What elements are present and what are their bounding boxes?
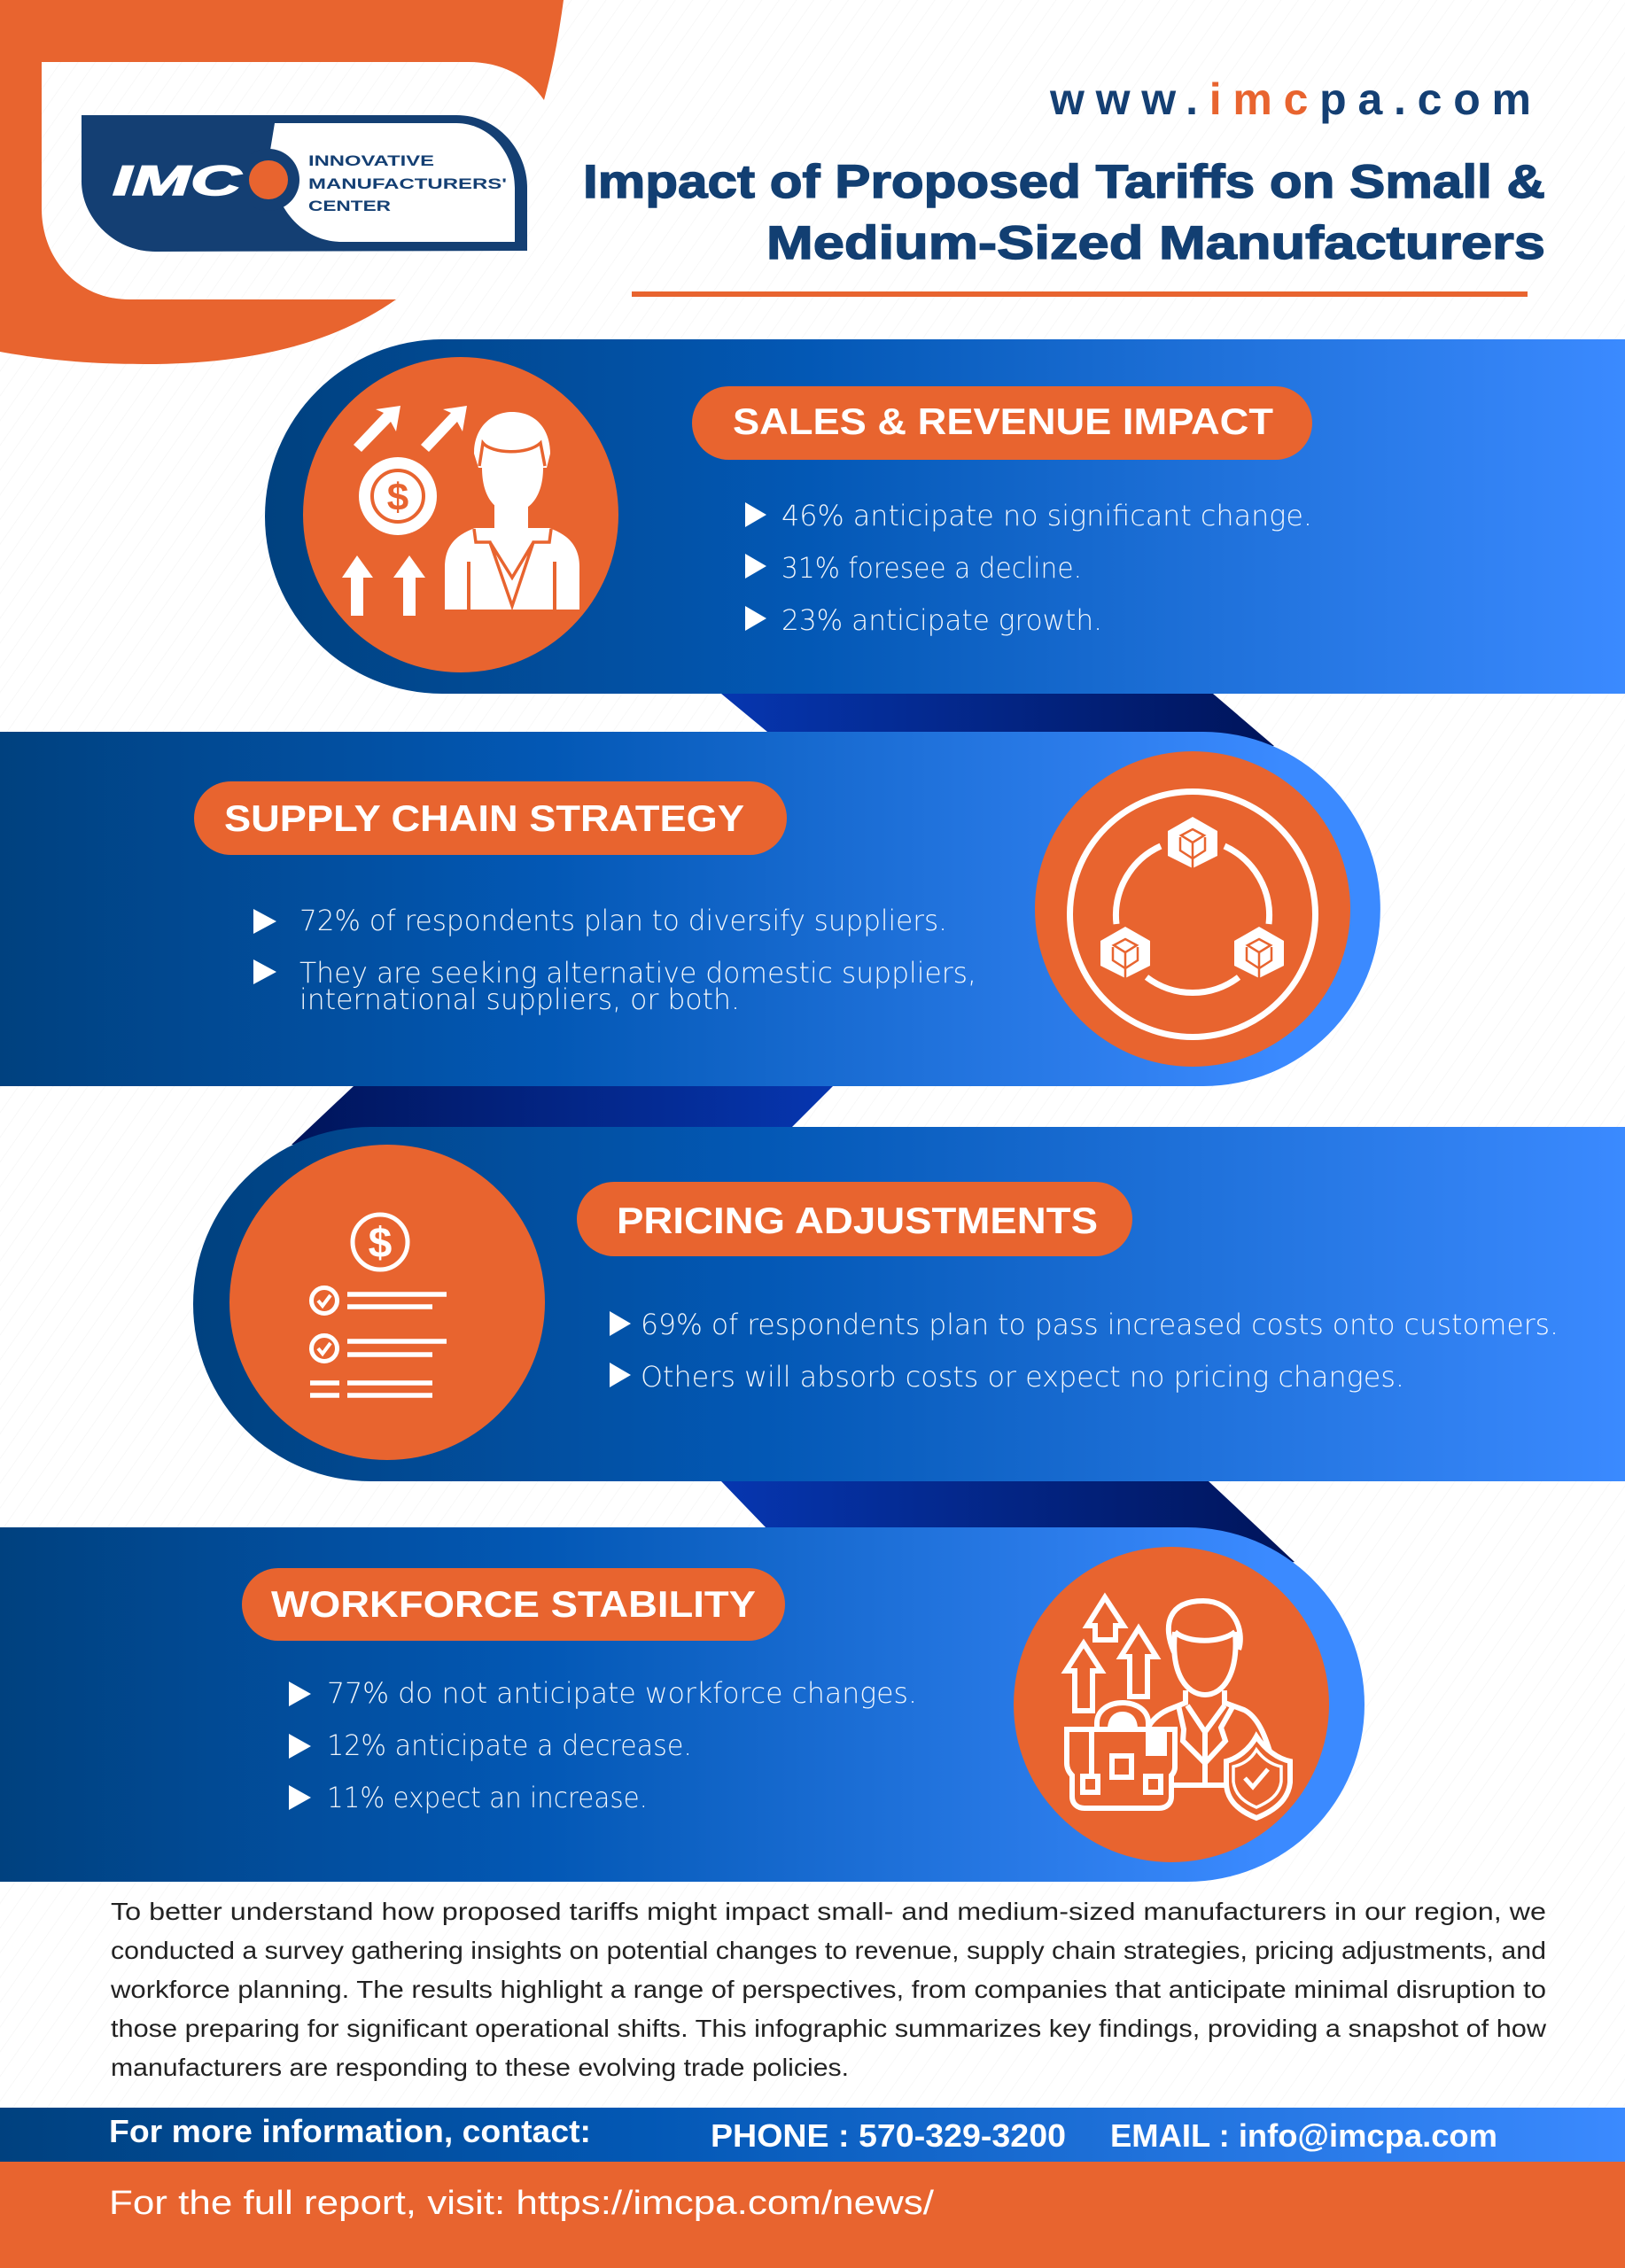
- intro paragraph: [110, 1898, 1547, 2081]
- heading pill: [692, 386, 1312, 460]
- intro paragraph: To better understand how proposed tariffs might impact small- and medium-sized manufacturers in our region, we: [111, 1898, 1546, 1925]
- bullet list: [745, 499, 1312, 637]
- heading pill: PRICING ADJUSTMENTS: [617, 1200, 1098, 1241]
- heading pill: [194, 781, 787, 855]
- title: Medium-Sized Manufacturers: [766, 217, 1545, 269]
- bullet list: 69% of respondents plan to pass increased costs onto customers.: [641, 1308, 1559, 1341]
- icon: pricing checklist: [310, 1215, 447, 1395]
- intro paragraph: workforce planning. The results highlight a range of perspectives, from companies that anticipate minimal disruption to: [110, 1976, 1546, 2003]
- bullet list: 31% foresee a decline.: [781, 551, 1082, 585]
- logo: IMC Innovative Manufacturers' Center: INNOVATIVE: [308, 152, 434, 169]
- icon: supply chain cycle: [1070, 792, 1315, 1037]
- logo: IMC Innovative Manufacturers' Center: [82, 115, 527, 252]
- heading pill: SALES & REVENUE IMPACT: [733, 400, 1273, 442]
- bullet list: [253, 904, 976, 1016]
- contact bar: For more information, contact:: [109, 2113, 591, 2149]
- contact bar: [0, 2108, 1625, 2162]
- heading pill: WORKFORCE STABILITY: [271, 1583, 756, 1625]
- intro paragraph: those preparing for significant operational shifts. This infographic summarizes key findings, providing a snapshot of how: [111, 2015, 1547, 2042]
- title: [583, 156, 1545, 269]
- panel: workforce stability: [0, 1527, 1365, 1882]
- icon: revenue growth person: $: [387, 476, 408, 519]
- bullet list: 11% expect an increase.: [327, 1781, 648, 1814]
- bullet list: 23% anticipate growth.: [781, 603, 1102, 637]
- bullet list: [610, 1308, 1559, 1394]
- full report bar: [0, 2162, 1625, 2268]
- heading pill: [577, 1182, 1132, 1256]
- header orange frame: [0, 0, 564, 364]
- website url: www. imc pa.com: [1049, 74, 1531, 124]
- contact bar: PHONE : 570-329-3200: [711, 2117, 1066, 2154]
- icon: pricing checklist: $: [369, 1220, 393, 1267]
- panel: supply chain strategy: [0, 732, 1380, 1086]
- bullet list: 12% anticipate a decrease.: [327, 1728, 692, 1762]
- bullet list: 46% anticipate no significant change.: [781, 499, 1312, 532]
- connector: supply chain to pricing: [292, 1086, 833, 1145]
- bullet list: international suppliers, or both.: [299, 983, 740, 1016]
- heading pill: SUPPLY CHAIN STRATEGY: [224, 797, 744, 839]
- icon: revenue growth person: [342, 406, 579, 616]
- logo: IMC Innovative Manufacturers' Center: IMC: [113, 157, 243, 204]
- intro paragraph: manufacturers are responding to these evolving trade policies.: [111, 2054, 849, 2081]
- bullet list: 77% do not anticipate workforce changes.: [327, 1676, 917, 1710]
- bullet list: They are seeking alternative domestic suppliers,: [299, 956, 976, 990]
- bullet list: Others will absorb costs or expect no pricing changes.: [641, 1360, 1404, 1394]
- title underline: [632, 291, 1528, 297]
- bullet list: 72% of respondents plan to diversify suppliers.: [299, 904, 947, 937]
- icon: workforce person with bag and shield: [1066, 1597, 1290, 1818]
- connector: sales to supply chain: [721, 694, 1274, 753]
- intro paragraph: conducted a survey gathering insights on potential changes to revenue, supply chain strategies, pricing adjustments, and: [111, 1937, 1546, 1964]
- heading pill: [242, 1568, 785, 1641]
- logo: IMC Innovative Manufacturers' Center: MANUFACTURERS': [308, 175, 507, 192]
- bullet list: [289, 1676, 917, 1814]
- contact bar: EMAIL : info@imcpa.com: [1110, 2117, 1497, 2154]
- logo: IMC Innovative Manufacturers' Center: CENTER: [308, 198, 391, 214]
- panel: pricing adjustments: [193, 1127, 1625, 1481]
- full report bar: For the full report, visit: https://imcpa.com/news/: [109, 2185, 935, 2222]
- panel: sales and revenue impact: [265, 339, 1625, 694]
- title: Impact of Proposed Tariffs on Small &: [583, 156, 1545, 208]
- connector: pricing to workforce: [721, 1481, 1295, 1568]
